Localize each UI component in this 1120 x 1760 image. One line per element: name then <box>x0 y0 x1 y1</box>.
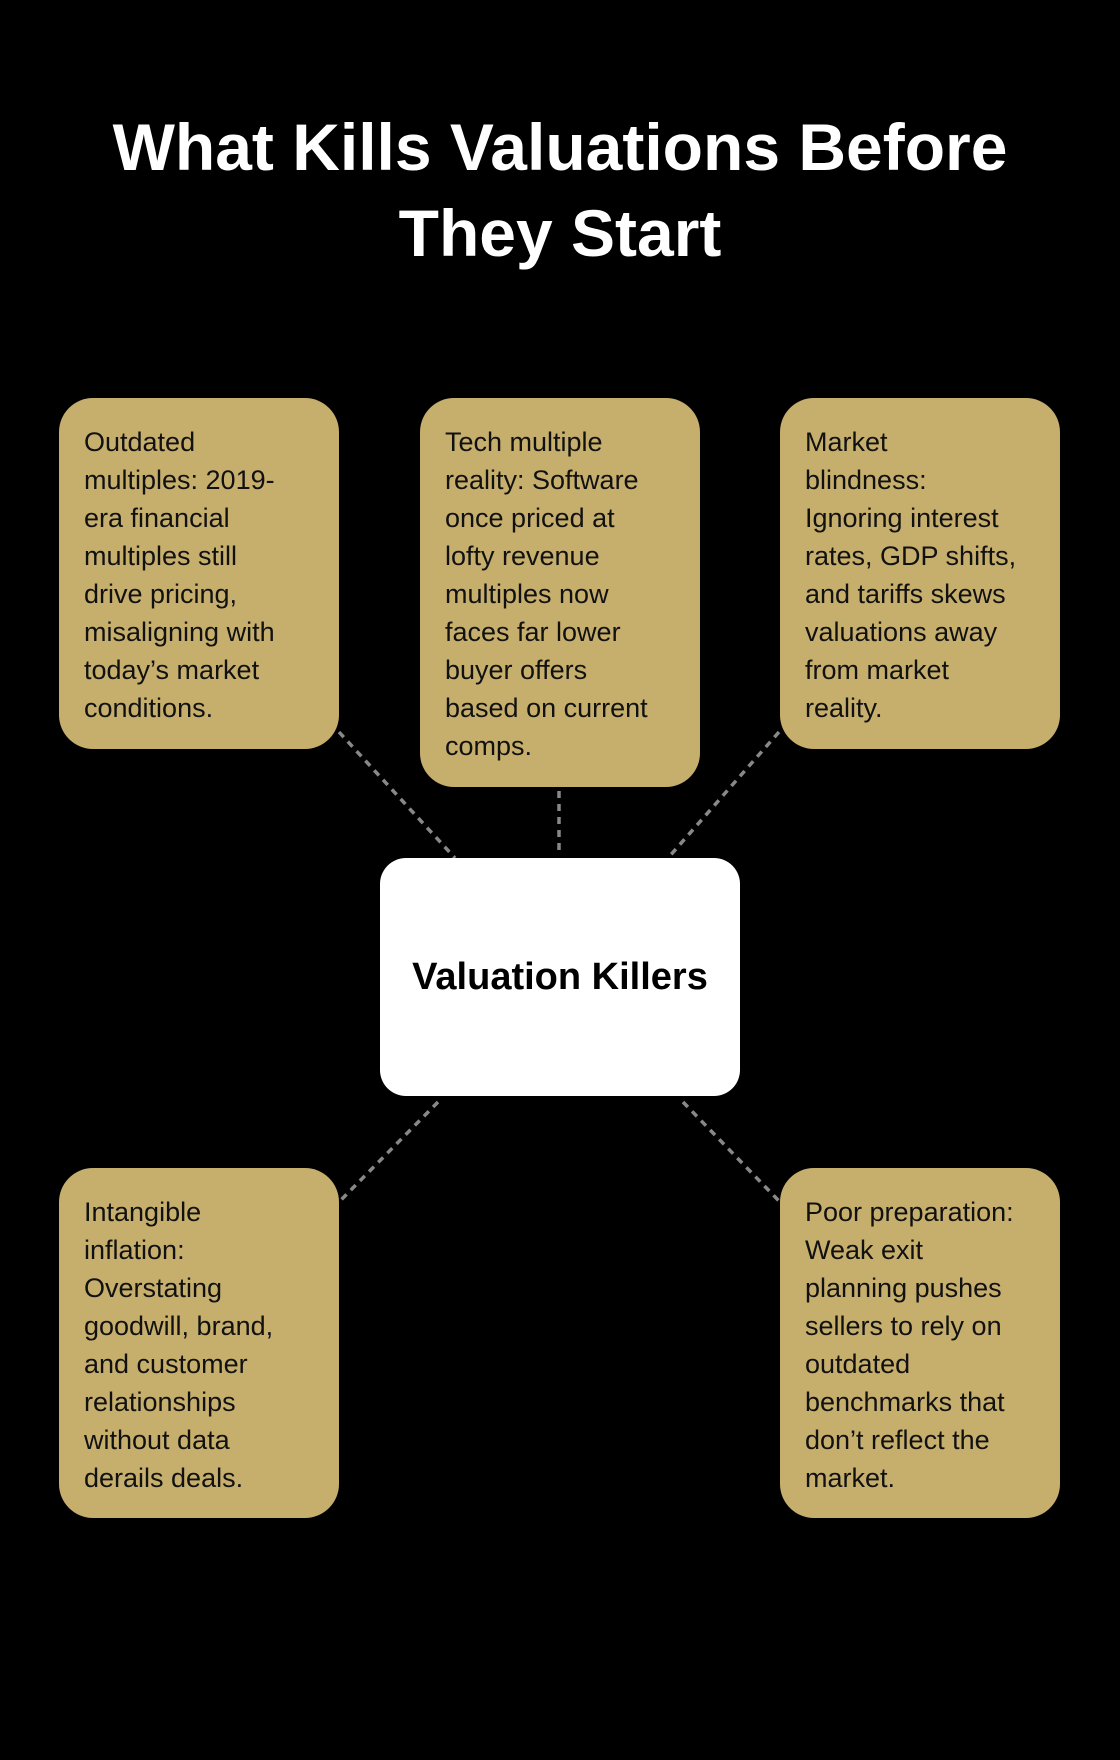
box: poor preparation: market. <box>805 1463 895 1493</box>
box: outdated multiples: drive pricing, <box>84 579 237 609</box>
title: What Kills Valuations Before <box>113 110 1007 184</box>
box: intangible inflation: and customer <box>84 1349 248 1379</box>
box: tech multiple reality: multiples now <box>445 579 609 609</box>
center: valuation killers: Valuation Killers <box>412 956 708 998</box>
box: market blindness: and tariffs skews <box>805 579 1006 609</box>
box: market blindness: Market <box>805 427 888 457</box>
box: outdated multiples: era financial <box>84 503 230 533</box>
center: valuation killers <box>380 858 740 1096</box>
box: intangible inflation: Overstating <box>84 1273 222 1303</box>
box: tech multiple reality: comps. <box>445 731 532 761</box>
box: market blindness: Ignoring interest <box>805 503 999 533</box>
box: poor preparation: planning pushes <box>805 1273 1002 1303</box>
box: market blindness: rates, GDP shifts, <box>805 541 1016 571</box>
box: intangible inflation: without data <box>84 1425 230 1455</box>
box: outdated multiples <box>59 398 339 749</box>
box: outdated multiples: misaligning with <box>84 617 275 647</box>
box: market blindness: valuations away <box>805 617 997 647</box>
box: poor preparation: sellers to rely on <box>805 1311 1002 1341</box>
box: intangible inflation: relationships <box>84 1387 236 1417</box>
box: intangible inflation: Intangible <box>84 1197 201 1227</box>
box: market blindness: from market <box>805 655 949 685</box>
box: poor preparation: Poor preparation: <box>805 1197 1014 1227</box>
box: poor preparation: Weak exit <box>805 1235 923 1265</box>
box: tech multiple reality: reality: Software <box>445 465 639 495</box>
box: market blindness: reality. <box>805 693 883 723</box>
box: outdated multiples: conditions. <box>84 693 213 723</box>
box: intangible inflation <box>59 1168 339 1518</box>
box: tech multiple reality: based on current <box>445 693 648 723</box>
title: They Start <box>399 196 721 270</box>
box: poor preparation <box>780 1168 1060 1518</box>
title <box>112 110 1007 270</box>
box: outdated multiples: multiples: 2019- <box>84 465 275 495</box>
box: tech multiple reality: faces far lower <box>445 617 621 647</box>
box: outdated multiples: today’s market <box>84 655 259 685</box>
box: poor preparation: don’t reflect the <box>805 1425 990 1455</box>
box: outdated multiples: Outdated <box>84 427 195 457</box>
box: poor preparation: benchmarks that <box>805 1387 1005 1417</box>
box: outdated multiples: multiples still <box>84 541 237 571</box>
box: tech multiple reality <box>420 398 700 787</box>
box: tech multiple reality: buyer offers <box>445 655 587 685</box>
box: tech multiple reality: lofty revenue <box>445 541 600 571</box>
box: poor preparation: outdated <box>805 1349 910 1379</box>
box: intangible inflation: goodwill, brand, <box>84 1311 273 1341</box>
box: tech multiple reality: Tech multiple <box>445 427 603 457</box>
box: intangible inflation: derails deals. <box>84 1463 243 1493</box>
box: market blindness: blindness: <box>805 465 927 495</box>
box: intangible inflation: inflation: <box>84 1235 185 1265</box>
box: tech multiple reality: once priced at <box>445 503 615 533</box>
box: market blindness <box>780 398 1060 749</box>
